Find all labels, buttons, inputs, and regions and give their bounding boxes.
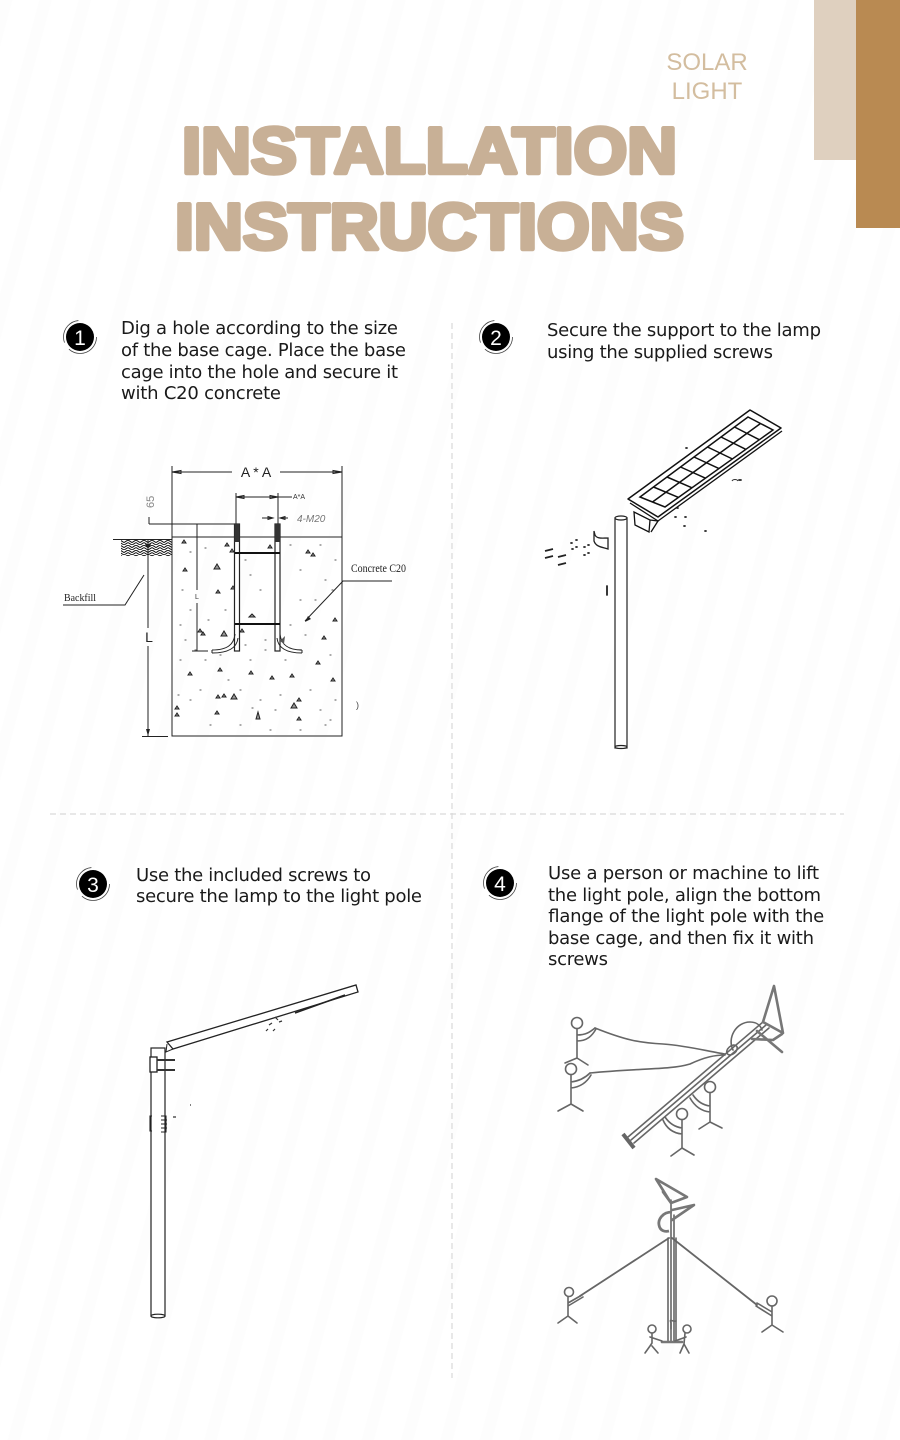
pole (151, 1048, 165, 1318)
title: INSTRUCTIONS (175, 190, 684, 263)
step 4 badge (484, 866, 516, 900)
lamp arm (167, 985, 358, 1049)
step 2 badge (480, 320, 512, 354)
lamp head (656, 1179, 694, 1231)
top dimension A*A: A * A (241, 464, 272, 480)
step 1 panel (63, 318, 406, 736)
dimension L (142, 556, 168, 736)
pole (615, 516, 627, 748)
concrete block (172, 537, 342, 736)
inner dimension A*A: A*A (293, 494, 305, 501)
step 2 text (547, 320, 821, 363)
person 4 (663, 1108, 694, 1156)
bolt label 4-M20 (262, 514, 326, 525)
person 1 (565, 1018, 596, 1065)
step 4 text: flange of the light pole with the (548, 906, 824, 927)
left person (558, 1288, 583, 1323)
raised pole diagram (558, 1179, 783, 1353)
base right person (675, 1325, 691, 1353)
right person (756, 1296, 783, 1332)
solar panel lamp (628, 410, 782, 532)
dimension L: L (145, 629, 153, 645)
step 3 text (136, 865, 422, 907)
step 4 text: screws (548, 949, 608, 970)
step 2 panel (480, 320, 821, 748)
hatch backfill (121, 540, 172, 556)
base left person (645, 1325, 662, 1353)
top dimension A*A (172, 464, 342, 537)
step 1 badge: 1 (74, 327, 86, 350)
title (175, 114, 684, 263)
step 3 panel (76, 865, 422, 1318)
loose hardware (173, 1017, 282, 1117)
upper clamp (150, 1057, 175, 1072)
step 3 badge (76, 868, 110, 900)
dimension 65: 65 (145, 496, 157, 508)
subtitle: solar light: SOLAR (666, 49, 748, 76)
step 4 badge: 4 (494, 873, 506, 896)
step 1 text (121, 318, 406, 404)
step 1 text: cage into the hole and secure it (121, 362, 398, 383)
person 3 (690, 1082, 722, 1129)
dimension 65 (113, 496, 234, 556)
decorative beige bar (814, 0, 856, 160)
nuts and loose hardware (571, 448, 741, 595)
backfill label (63, 575, 144, 605)
title: INSTALLATION (182, 114, 677, 187)
step 4 text: base cage, and then fix it with (548, 928, 814, 949)
ropes (590, 1028, 725, 1073)
step 3 text: secure the lamp to the light pole (136, 886, 422, 907)
screws (545, 549, 566, 565)
base cage (212, 524, 302, 653)
step 4 text: the light pole, align the bottom (548, 885, 821, 906)
backfill label: Backfill (64, 593, 96, 604)
inner dimension L (192, 524, 208, 651)
subtitle: solar light (666, 49, 748, 105)
step 1 text: Dig a hole according to the size (121, 318, 398, 339)
tilted pole (623, 1022, 769, 1148)
concrete label: Concrete C20 (351, 563, 406, 575)
step 1 text: with C20 concrete (121, 383, 281, 404)
lifting with ropes diagram (558, 986, 783, 1156)
person 2 (558, 1064, 591, 1111)
upright pole (662, 1200, 682, 1342)
guy ropes (580, 1238, 757, 1305)
step 4 text (548, 863, 824, 970)
pole bracket (594, 531, 608, 549)
step 2 text: Secure the support to the lamp (547, 320, 821, 341)
concrete label (305, 563, 406, 622)
assembled lamp diagram (150, 985, 358, 1318)
inner dimension L: L (195, 594, 199, 601)
foundation diagram: ) (356, 700, 359, 710)
step 4 panel (484, 863, 824, 1353)
foundation diagram (63, 464, 406, 736)
lamp head (725, 986, 783, 1057)
subtitle: solar light: LIGHT (672, 78, 743, 105)
step 4 text: Use a person or machine to lift (548, 863, 819, 884)
step 3 text: Use the included screws to (136, 865, 371, 886)
step 2 text: using the supplied screws (547, 342, 773, 363)
step 1 badge (64, 320, 96, 354)
inner dimension A*A (236, 493, 305, 524)
exploded lamp diagram (545, 410, 782, 748)
aggregate dots (178, 545, 336, 730)
decorative brown bar (856, 0, 900, 228)
bolt label 4-M20: 4-M20 (297, 514, 326, 525)
lower clamp (150, 1116, 167, 1132)
step 3 badge: 3 (87, 874, 99, 897)
step 2 badge: 2 (490, 327, 502, 350)
aggregate triangles (175, 540, 337, 720)
step 1 text: of the base cage. Place the base (121, 340, 406, 361)
